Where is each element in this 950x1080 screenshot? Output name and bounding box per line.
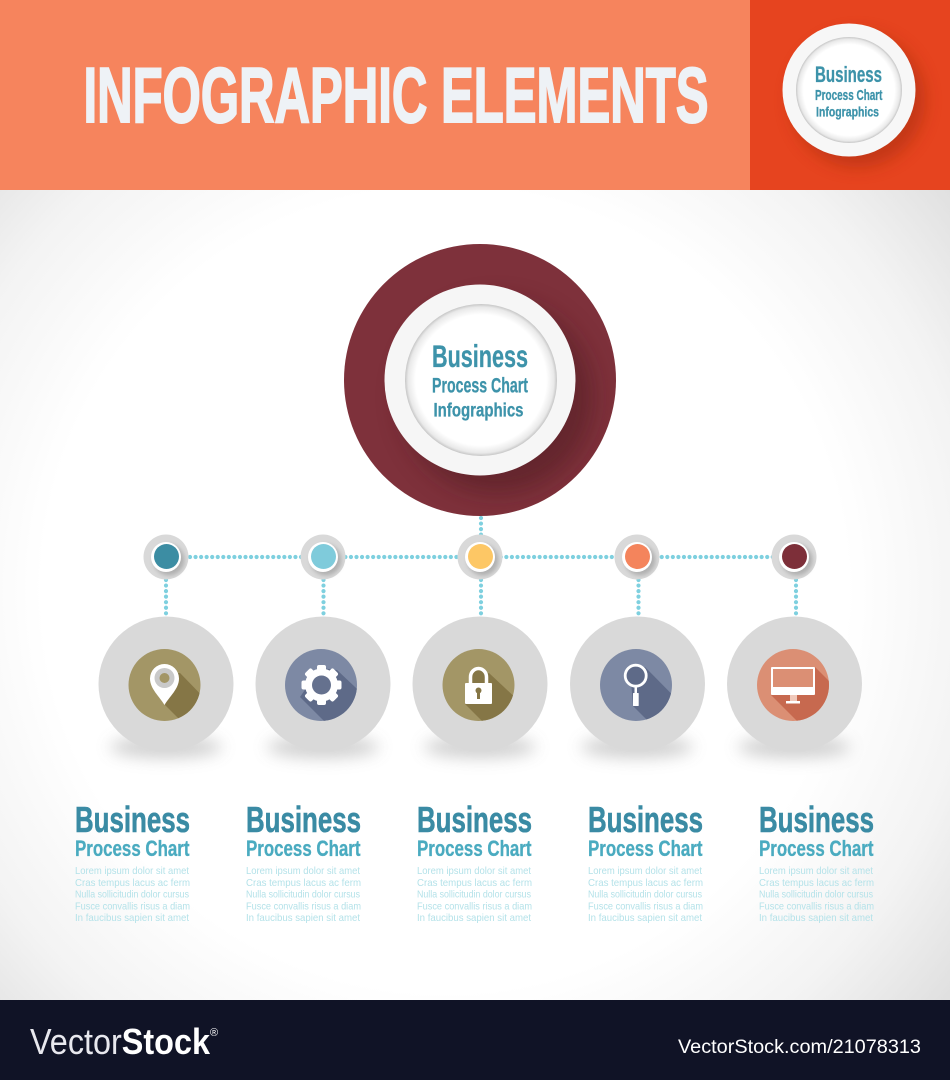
page background [0,190,950,1000]
text block 1: Cras tempus lacus ac ferm [75,877,190,889]
text block 4 [588,799,703,924]
text block 4: Lorem ipsum dolor sit amet [588,865,702,877]
central circle: Process Chart [432,374,528,398]
node 3 [458,534,502,580]
panel: header banner [0,0,950,190]
text block 4: Business [588,799,703,840]
text block 2 [246,799,361,924]
text block 5: Process Chart [759,836,874,861]
text block 3: Process Chart [417,836,532,861]
text block 2: In faucibus sapien sit amet [246,912,360,924]
node 4 [614,534,660,580]
badge: header circle [782,24,925,167]
badge: header circle: Infographics [816,104,879,120]
text block 4: Cras tempus lacus ac ferm [588,877,703,889]
badge: header circle: Business [815,62,882,87]
text block 2: Business [246,799,361,840]
text block 2: Nulla sollicitudin dolor cursus [246,888,360,900]
text block 3: Cras tempus lacus ac ferm [417,877,532,889]
text block 4: In faucibus sapien sit amet [588,912,702,924]
footer bar [0,1000,950,1080]
node 1 [144,534,188,580]
icon disc 1: location pin [98,616,240,758]
footer logo: VectorStock [30,1021,211,1062]
text block 3: In faucibus sapien sit amet [417,912,531,924]
text block 2: Process Chart [246,836,361,861]
icon disc 4: magnifier [570,616,710,758]
text block 4: Nulla sollicitudin dolor cursus [588,888,702,900]
badge: header circle: Process Chart [815,88,883,104]
icon disc 2: gear [256,616,390,758]
text block 5: Lorem ipsum dolor sit amet [759,865,873,877]
text block 5: Business [759,799,874,840]
central circle: Infographics [434,400,524,422]
text block 3: Fusce convallis risus a diam [417,900,532,912]
text block 1: Business [75,799,190,840]
text block 2: Lorem ipsum dolor sit amet [246,865,360,877]
text block 5: Cras tempus lacus ac ferm [759,877,874,889]
text block 3: Business [417,799,532,840]
central circle [344,244,616,516]
central circle: Business [432,338,528,374]
text block 4: Fusce convallis risus a diam [588,900,703,912]
text block 2: Cras tempus lacus ac ferm [246,877,361,889]
text block 5 [759,799,874,924]
text block 5: Fusce convallis risus a diam [759,900,874,912]
text block 3 [417,799,532,924]
footer registered mark: ® [210,1027,218,1039]
node 5 [772,534,816,580]
text block 1 [75,799,190,924]
text block 3: Nulla sollicitudin dolor cursus [417,888,531,900]
text block 1: Nulla sollicitudin dolor cursus [75,888,189,900]
text block 1: Process Chart [75,836,190,861]
text block 1: Lorem ipsum dolor sit amet [75,865,189,877]
connector: dotted lines [166,518,796,616]
text block 2: Fusce convallis risus a diam [246,900,361,912]
icon disc 5: monitor [727,616,862,758]
icon disc 3: padlock [412,616,550,758]
text block 3: Lorem ipsum dolor sit amet [417,865,531,877]
text block 1: Fusce convallis risus a diam [75,900,190,912]
text block 5: In faucibus sapien sit amet [759,912,873,924]
text block 5: Nulla sollicitudin dolor cursus [759,888,873,900]
text block 4: Process Chart [588,836,703,861]
footer url: VectorStock.com/21078313 [678,1036,921,1058]
node 2 [300,534,346,580]
text block 1: In faucibus sapien sit amet [75,912,189,924]
